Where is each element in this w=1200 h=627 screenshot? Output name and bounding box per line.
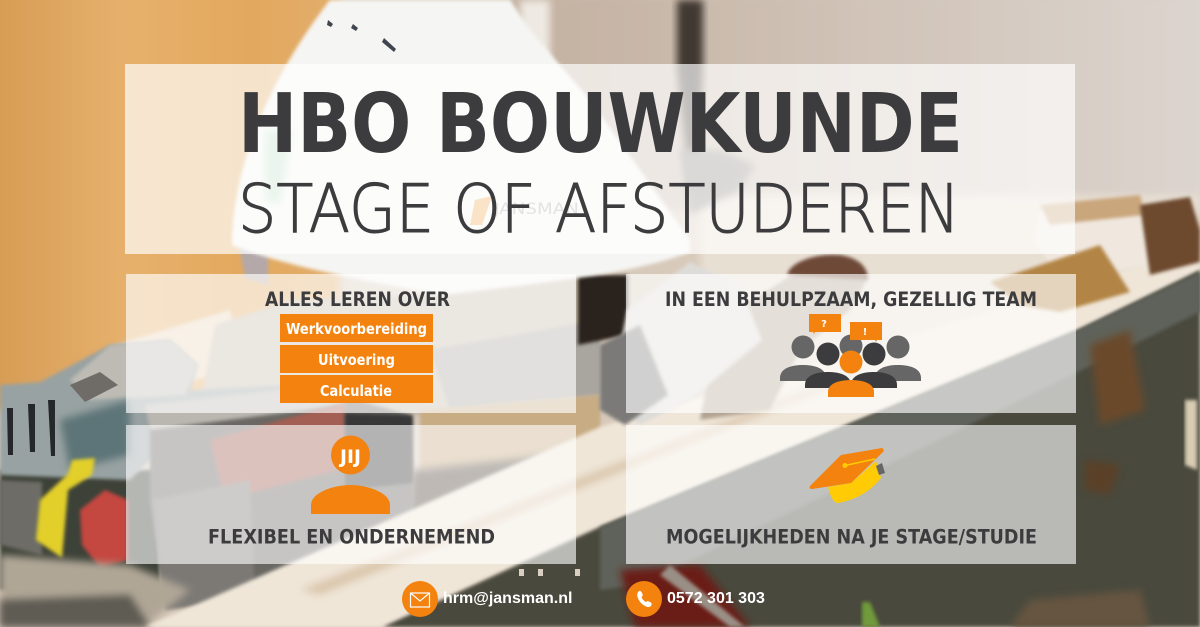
panel: mogelijkheden <box>626 425 1076 564</box>
helmet <box>232 0 755 295</box>
subheading: Stage of afstuderen: STAGE OF AFSTUDEREN <box>238 170 960 248</box>
tag: uitvoering <box>280 345 433 373</box>
contact: email <box>402 581 572 617</box>
icon: team with speech bubbles <box>780 314 921 397</box>
panel: team <box>626 274 1076 413</box>
tag: calculatie <box>280 375 433 403</box>
icon: envelope <box>402 581 438 617</box>
icon: team with speech bubbles: ? <box>821 319 827 330</box>
panel heading: alles leren over: ALLES LEREN OVER <box>265 288 450 311</box>
title panel <box>125 64 1075 254</box>
tag: werkvoorbereiding <box>280 314 433 342</box>
icon: phone <box>626 581 662 617</box>
tag: werkvoorbereiding: Werkvoorbereiding <box>286 320 427 338</box>
panel heading: mogelijkheden: MOGELIJKHEDEN NA JE STAGE/STUDIE <box>666 526 1037 548</box>
contact: email: hrm@jansman.nl <box>443 590 572 607</box>
icon: person labelled jij <box>311 436 390 514</box>
panel: flexibel en ondernemend <box>126 425 576 564</box>
icon: person labelled jij: JIJ <box>338 446 361 468</box>
icon: graduation cap <box>810 448 885 503</box>
contact: phone: 0572 301 303 <box>667 590 765 607</box>
panel heading: team: IN EEN BEHULPZAAM, GEZELLIG TEAM <box>665 288 1037 311</box>
contact: phone <box>626 581 765 617</box>
helmet: JANSMAN <box>493 199 579 218</box>
icon: team with speech bubbles: ! <box>863 327 867 338</box>
heading: HBO Bouwkunde: HBO BOUWKUNDE <box>238 77 963 172</box>
panel: alles leren over <box>126 274 576 413</box>
panel heading: flexibel en ondernemend: FLEXIBEL EN ONDERNEMEND <box>208 526 495 548</box>
tag: uitvoering: Uitvoering <box>318 351 395 369</box>
tag: calculatie: Calculatie <box>320 382 392 400</box>
